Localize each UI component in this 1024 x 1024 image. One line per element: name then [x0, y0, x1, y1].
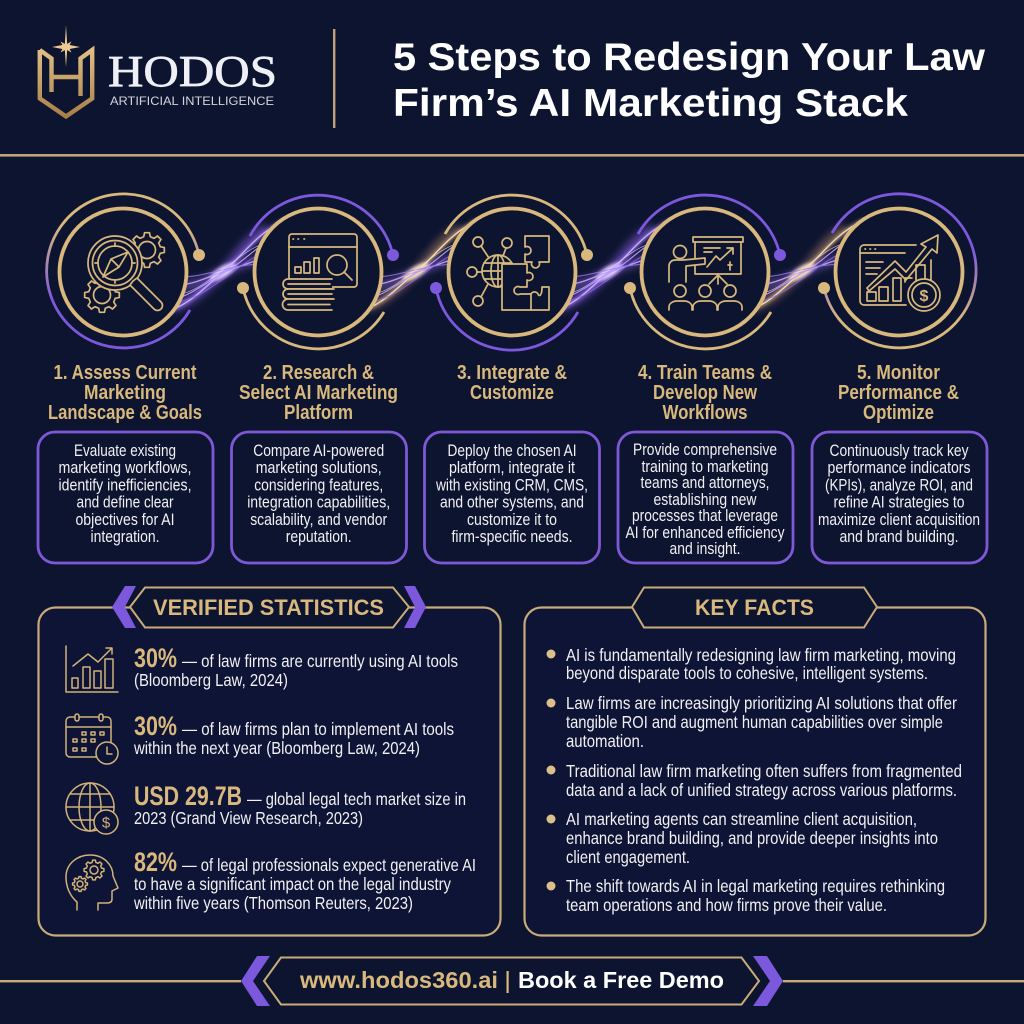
- icon: presenter and audience: [669, 237, 743, 310]
- fact 4: AI marketing agents can streamline client acquisition,: [566, 809, 917, 829]
- footer call to action: www.hodos360.ai: [299, 967, 498, 993]
- step 3 description box: customize it to: [467, 511, 557, 529]
- step 3 description box: platform, integrate it: [449, 459, 575, 477]
- fact 5: team operations and how firms prove their value.: [566, 895, 887, 915]
- statistic: USD 29.7B market size: — global legal tech market size in: [247, 789, 466, 809]
- step 5 heading: [838, 362, 959, 424]
- step 4 heading: 4. Train Teams &: [638, 362, 772, 384]
- icon: globe with dollar coin: [66, 783, 118, 834]
- fact 1: beyond disparate tools to cohesive, intelligent systems.: [566, 663, 928, 683]
- statistic: 30% current use: 30%: [134, 643, 177, 673]
- icon: analytics window and coin: [860, 235, 940, 311]
- step 3 heading: [457, 362, 567, 404]
- fact 2: tangible ROI and augment human capabilities over simple: [566, 712, 943, 732]
- step 2 description box: scalability, and vendor: [250, 511, 388, 529]
- fact 2: [546, 693, 957, 751]
- step 5 description box: Continuously track key: [830, 442, 969, 460]
- step 4 description box: processes that leverage: [632, 507, 778, 525]
- step 1 description box: [38, 432, 213, 563]
- step 3 description box: and other systems, and: [440, 494, 584, 512]
- title: 5 Steps to Redesign Your Law: [393, 36, 986, 79]
- fact 3: data and a lack of unified strategy across various platforms.: [566, 780, 957, 800]
- icon: analytics window and coin: $: [920, 288, 929, 305]
- statistic: USD 29.7B market size: [134, 781, 466, 828]
- fact 2: Law firms are increasingly prioritizing AI solutions that offer: [566, 693, 957, 713]
- step 1 heading: Landscape & Goals: [48, 402, 202, 424]
- step 4 heading: [638, 362, 772, 424]
- fact 3: Traditional law firm marketing often suffers from fragmented: [566, 761, 962, 781]
- step 4 medallion: [624, 195, 786, 349]
- step 1 description box: and define clear: [76, 494, 174, 512]
- panel: verified statistics: [38, 586, 500, 936]
- icon: compass magnifier with gears: [85, 233, 164, 312]
- banner: key facts: [632, 588, 877, 628]
- energy waves connecting the steps: [161, 220, 864, 314]
- step 3 description box: firm-specific needs.: [452, 528, 572, 546]
- step 5 description box: refine AI strategies to: [834, 494, 964, 512]
- statistic: 82% expect impact: 82%: [134, 847, 177, 877]
- fact 1: AI is fundamentally redesigning law firm marketing, moving: [566, 645, 956, 665]
- step 2 description box: integration capabilities,: [247, 494, 390, 512]
- footer call to action: [0, 956, 1024, 1006]
- step 5 description box: performance indicators: [828, 459, 970, 477]
- step 5 description box: [812, 432, 987, 563]
- statistic: 30% planned adoption: 30%: [134, 711, 177, 741]
- statistic: 30% current use: (Bloomberg Law, 2024): [134, 670, 288, 690]
- step 1 heading: [48, 362, 202, 424]
- icon: dashboard and books: [283, 234, 357, 310]
- statistic: 82% expect impact: within five years (Thomson Reuters, 2023): [133, 893, 413, 913]
- statistic: 82% expect impact: to have a significant impact on the legal industry: [134, 874, 451, 894]
- statistic: 30% current use: — of law firms are currently using AI tools: [182, 651, 458, 671]
- step 2 medallion: [237, 195, 399, 349]
- step 5 heading: 5. Monitor: [857, 362, 940, 384]
- step 3 description box: with existing CRM, CMS,: [435, 476, 588, 494]
- title: [393, 36, 986, 125]
- statistic: 30% planned adoption: within the next year (Bloomberg Law, 2024): [133, 738, 420, 758]
- step 3 description box: Deploy the chosen AI: [448, 442, 576, 460]
- step 2 heading: Select AI Marketing: [239, 382, 398, 404]
- fact 4: [546, 809, 938, 867]
- fact 5: The shift towards AI in legal marketing requires rethinking: [566, 876, 945, 896]
- step 1 description box: identify inefficiencies,: [58, 476, 192, 494]
- step 1 description box: marketing workflows,: [58, 459, 192, 477]
- icon: shield with star: [40, 25, 92, 116]
- statistic: 82% expect impact: — of legal professionals expect generative AI: [182, 855, 476, 875]
- fact 2: automation.: [566, 731, 644, 751]
- step 1 description box: integration.: [90, 528, 160, 546]
- banner: key facts: KEY FACTS: [695, 595, 814, 620]
- step 4 description box: Provide comprehensive: [633, 441, 777, 459]
- step 5 heading: Optimize: [863, 402, 934, 424]
- fact 3: [546, 761, 962, 800]
- fact 4: enhance brand building, and provide deeper insights into: [566, 828, 938, 848]
- fact 4: client engagement.: [566, 847, 690, 867]
- wordmark: HODOS: [108, 47, 277, 96]
- step 2 description box: reputation.: [286, 528, 352, 546]
- step 4 heading: Workflows: [662, 402, 748, 424]
- step 2 description box: considering features,: [254, 476, 383, 494]
- step 5 description box: and brand building.: [840, 528, 958, 546]
- icon: globe with dollar coin: $: [102, 814, 111, 832]
- step 2 description box: Compare AI-powered: [253, 442, 384, 460]
- panel: key facts: [524, 588, 986, 936]
- step 5 description box: (KPIs), analyze ROI, and: [825, 476, 973, 494]
- step 4 description box: training to marketing: [642, 458, 768, 476]
- statistic: USD 29.7B market size: USD 29.7B: [134, 781, 242, 811]
- fact 1: [546, 645, 956, 683]
- icon: head with gears: [66, 855, 118, 910]
- statistic: 30% planned adoption: — of law firms plan to implement AI tools: [182, 719, 454, 739]
- logo: Hodos Artificial Intelligence: [40, 25, 277, 116]
- step 4 description box: [618, 432, 793, 563]
- fact 5: [546, 876, 945, 915]
- step 2 heading: [239, 362, 398, 424]
- icon: global network and puzzle: [467, 236, 549, 310]
- title: Firm’s AI Marketing Stack: [393, 82, 908, 125]
- step 1 heading: Marketing: [84, 382, 166, 404]
- step 4 description box: establishing new: [654, 491, 757, 509]
- step 4 description box: teams and attorneys,: [640, 474, 770, 492]
- tagline: ARTIFICIAL INTELLIGENCE: [110, 96, 274, 108]
- step 4 description box: AI for enhanced efficiency: [626, 524, 785, 542]
- banner: verified statistics: VERIFIED STATISTICS: [153, 595, 384, 620]
- step 2 description box: marketing solutions,: [256, 459, 382, 477]
- step 3 description box: [424, 432, 600, 563]
- statistic: 30% current use: [134, 643, 458, 690]
- step 4 heading: Develop New: [653, 382, 757, 404]
- step 3 heading: 3. Integrate &: [457, 362, 567, 384]
- footer call to action: Book a Free Demo: [518, 967, 724, 993]
- step 2 heading: 2. Research &: [263, 362, 374, 384]
- step 5 heading: Performance &: [838, 382, 959, 404]
- banner: verified statistics: [112, 586, 426, 628]
- step 3 heading: Customize: [470, 382, 554, 404]
- step 1 heading: 1. Assess Current: [54, 362, 197, 384]
- step 1 description box: Evaluate existing: [74, 442, 176, 460]
- icon: calendar with clock: [66, 714, 118, 764]
- step 1 description box: objectives for AI: [76, 511, 174, 529]
- step 1 medallion: [47, 194, 205, 348]
- statistic: USD 29.7B market size: 2023 (Grand View Research, 2023): [134, 808, 363, 828]
- statistic: 30% planned adoption: [133, 711, 454, 758]
- icon: bar chart: [66, 646, 118, 692]
- step 5 medallion: [818, 194, 976, 348]
- step 2 heading: Platform: [284, 402, 353, 424]
- step 3 medallion: [430, 195, 593, 350]
- step 4 description box: and insight.: [670, 540, 740, 558]
- step 2 description box: [232, 432, 406, 563]
- step 5 description box: maximize client acquisition: [818, 511, 980, 529]
- statistic: 82% expect impact: [133, 847, 476, 913]
